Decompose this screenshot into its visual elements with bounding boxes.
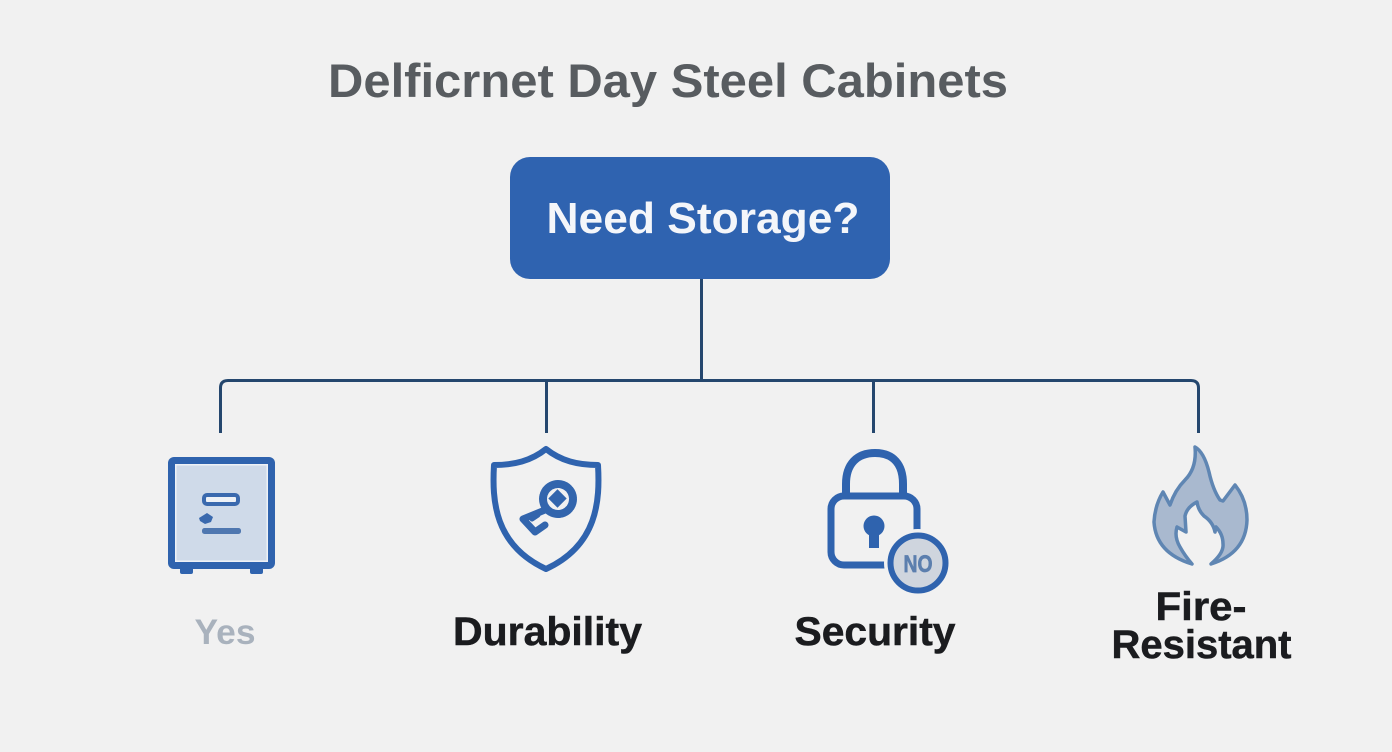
icon: shield with key	[494, 449, 598, 569]
label: Yes: Yes	[194, 613, 256, 652]
title: Delficrnet Day Steel Cabinets	[328, 54, 1008, 107]
decision box: Need Storage?: Need Storage?	[546, 194, 860, 243]
label: Fire-Resistant: Fire-	[1156, 585, 1246, 629]
icon: padlock with NO badge	[831, 453, 952, 597]
icon: storage cabinet	[168, 457, 275, 574]
decision box: Need Storage?	[510, 157, 890, 279]
label: Security: Security	[794, 610, 956, 654]
label: Fire-Resistant: Resistant	[1112, 623, 1292, 667]
label: Durability: Durability	[453, 610, 643, 654]
label: Fire-Resistant	[1112, 585, 1292, 667]
icon: padlock with NO badge: NO	[904, 551, 932, 578]
connector tree	[220, 279, 1198, 433]
icon: flame	[1154, 447, 1247, 564]
